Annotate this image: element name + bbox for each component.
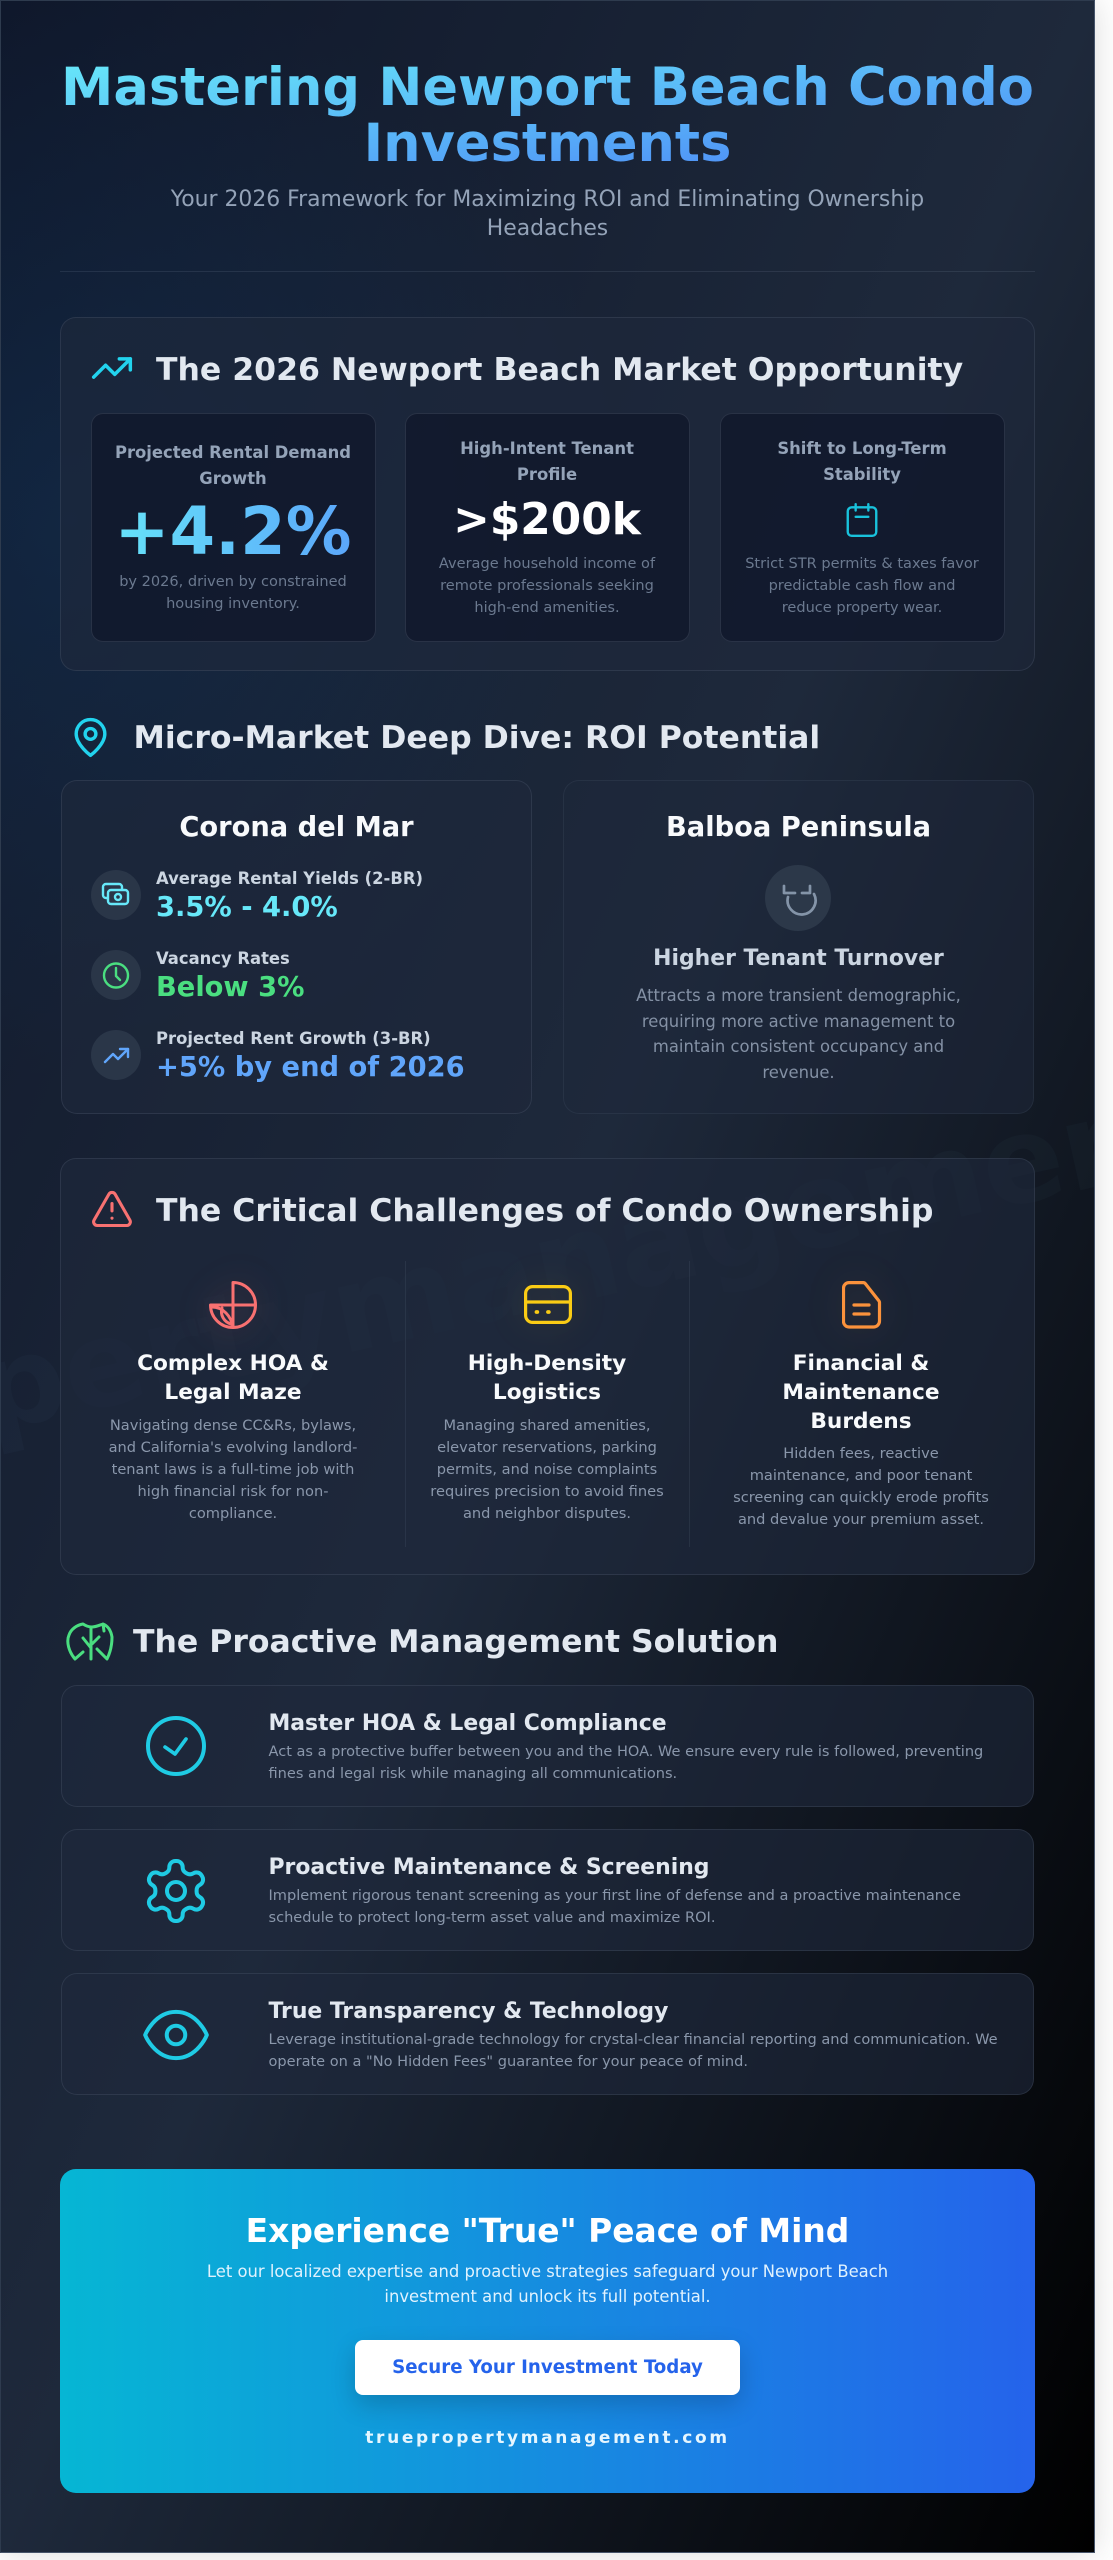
icon: document [842, 1281, 882, 1329]
header [60, 57, 1035, 272]
stat note: predictable cash flow and [769, 577, 955, 594]
solution text: schedule to protect long-term asset value and maximize ROI. [268, 1909, 715, 1926]
CTA text: investment and unlock its full potential. [384, 2287, 711, 2306]
panel: Balboa Peninsula [563, 780, 1034, 1114]
stat label: Projected Rental Demand [115, 443, 351, 462]
challenge text: and California's evolving landlord- [109, 1439, 357, 1456]
icon: gear [146, 1859, 206, 1923]
stat label: High-Intent Tenant [460, 439, 634, 458]
solution text: fines and legal risk while managing all communications. [268, 1765, 677, 1782]
section heading: micro-market [74, 718, 820, 758]
solution title: Proactive Maintenance & Screening [268, 1854, 709, 1880]
challenge text: compliance. [189, 1505, 277, 1522]
challenge title: Burdens [810, 1409, 912, 1434]
stat note [745, 555, 979, 616]
stat label: Shift to Long-Term [777, 439, 947, 458]
panel: market opportunity [60, 317, 1035, 671]
stat note: housing inventory. [166, 595, 300, 612]
challenge: financial [733, 1281, 989, 1528]
challenge title [782, 1351, 940, 1434]
heading: challenges: The Critical Challenges of Condo Ownership [156, 1192, 933, 1228]
heading text: The Proactive Management Solution [133, 1624, 778, 1660]
stat label: Growth [199, 469, 267, 488]
stat note [439, 555, 656, 616]
icon: access card [524, 1285, 572, 1324]
stat note: by 2026, driven by constrained [119, 573, 347, 590]
solution text [268, 1887, 961, 1926]
icon: eye [143, 2010, 209, 2060]
solution text [268, 1743, 983, 1782]
stat note: reduce property wear. [782, 599, 942, 616]
icon: map pin [74, 718, 106, 758]
challenge text: maintenance, and poor tenant [750, 1467, 972, 1484]
solution text: operate on a "No Hidden Fees" guarantee for your peace of mind. [268, 2053, 748, 2070]
solution text [268, 2031, 998, 2070]
metric label: Vacancy Rates [156, 949, 290, 968]
stat label: Profile [517, 465, 577, 484]
panel heading: Balboa Peninsula [666, 812, 931, 843]
stat note: high-end amenities. [474, 599, 620, 616]
callout text: revenue. [762, 1063, 835, 1082]
challenge title: High-Density [468, 1351, 626, 1376]
callout text: maintain consistent occupancy and [653, 1037, 944, 1056]
section heading: solution [66, 1622, 778, 1661]
challenge: HOA legal [109, 1281, 357, 1522]
challenge text: Managing shared amenities, [444, 1417, 650, 1434]
challenge text: requires precision to avoid fines [430, 1483, 664, 1500]
stat note: Strict STR permits & taxes favor [745, 555, 979, 572]
challenge text [430, 1417, 664, 1522]
solution title: Master HOA & Legal Compliance [268, 1710, 667, 1736]
stat note: remote professionals seeking [440, 577, 654, 594]
heading text: Micro-Market Deep Dive: ROI Potential [134, 720, 820, 756]
challenge text: and devalue your premium asset. [738, 1511, 984, 1528]
callout text: Attracts a more transient demographic, [636, 986, 961, 1005]
challenge title: Legal Maze [164, 1380, 302, 1405]
stat note [119, 573, 347, 612]
challenge title [137, 1351, 329, 1405]
challenge text: Navigating dense CC&Rs, bylaws, [110, 1417, 356, 1434]
challenge text: Hidden fees, reactive [783, 1445, 939, 1462]
metric label: Average Rental Yields (2-BR) [156, 869, 423, 888]
icon: warning triangle [92, 1190, 132, 1227]
metric value: Below 3% [156, 972, 304, 1003]
metric value: 3.5% - 4.0% [156, 892, 338, 923]
panel heading: Corona del Mar [179, 812, 414, 843]
icon: trending up [92, 357, 132, 379]
challenge text [733, 1445, 989, 1528]
challenge title: Complex HOA & [137, 1351, 329, 1376]
stat value: >$200k [453, 494, 641, 545]
icon: trend up [91, 1030, 141, 1080]
challenge title: Financial & [793, 1351, 929, 1376]
website URL: truepropertymanagement.com [365, 2428, 730, 2448]
metric value: +5% by end of 2026 [156, 1052, 465, 1083]
stat value: +4.2% [115, 494, 351, 570]
panel: compliance solution [61, 1685, 1034, 1807]
callout text: requiring more active management to [642, 1012, 955, 1031]
challenge text: screening can quickly erode profits [733, 1489, 989, 1506]
CTA text [207, 2262, 888, 2306]
stat card: long-term stability [720, 413, 1004, 642]
heading: market opportunity: The 2026 Newport Beach Market Opportunity [156, 352, 963, 388]
CTA text: Let our localized expertise and proactive strategies safeguard your Newport Beach [207, 2262, 888, 2281]
metric: vacancy [91, 949, 304, 1003]
solution text: Leverage institutional-grade technology for crystal-clear financial reporting and communication. We [268, 2031, 998, 2048]
icon: money [91, 870, 141, 920]
callout heading: Higher Tenant Turnover [653, 946, 944, 971]
challenge title [468, 1351, 626, 1405]
panel: Corona del Mar [61, 780, 532, 1114]
icon: green sprout [66, 1622, 114, 1661]
title: Mastering Newport Beach Condo [61, 57, 1034, 118]
metric: rent growth [91, 1029, 465, 1083]
icon: pie chart [209, 1281, 257, 1329]
icon: magnet [765, 865, 831, 931]
solution text: Implement rigorous tenant screening as your first line of defense and a proactive maintenance [268, 1887, 961, 1904]
icon: calendar [846, 503, 878, 537]
challenge text: elevator reservations, parking [437, 1439, 657, 1456]
challenge title: Logistics [493, 1380, 601, 1405]
challenge text: permits, and noise complaints [437, 1461, 657, 1478]
solution text: Act as a protective buffer between you and the HOA. We ensure every rule is followed, preventing [268, 1743, 983, 1760]
subtitle: Your 2026 Framework for Maximizing ROI and Eliminating Ownership [171, 186, 924, 212]
CTA heading: Experience "True" Peace of Mind [246, 2211, 849, 2250]
challenge: logistics [430, 1285, 664, 1522]
CTA button [355, 2340, 740, 2395]
title: Investments [364, 113, 731, 174]
challenge text: tenant laws is a full-time job with [112, 1461, 354, 1478]
stat label: Stability [823, 465, 901, 484]
subtitle: Headaches [487, 216, 608, 240]
stat label [777, 439, 947, 484]
challenge title: Maintenance [782, 1380, 940, 1405]
stat card: tenant profile [404, 413, 690, 642]
call to action banner [60, 2169, 1035, 2493]
title [60, 60, 1035, 171]
challenge text: high financial risk for non- [138, 1483, 328, 1500]
metric: rental yields [91, 869, 423, 923]
stat note: Average household income of [439, 555, 655, 572]
panel: transparency solution [61, 1973, 1034, 2095]
CTA button: Secure Your Investment Today [392, 2357, 703, 2378]
stat label [115, 443, 351, 488]
challenge text: and neighbor disputes. [463, 1505, 631, 1522]
challenge text [109, 1417, 357, 1522]
subtitle [170, 186, 924, 240]
panel: critical challenges [60, 1158, 1035, 1575]
stat card: rental demand [90, 413, 376, 642]
stat label [460, 439, 634, 484]
icon: clock [91, 950, 141, 1000]
icon: check circle [146, 1716, 206, 1776]
solution title: True Transparency & Technology [268, 1998, 668, 2024]
metric label: Projected Rent Growth (3-BR) [156, 1029, 431, 1048]
panel: maintenance solution [61, 1829, 1034, 1951]
callout text [636, 986, 961, 1082]
